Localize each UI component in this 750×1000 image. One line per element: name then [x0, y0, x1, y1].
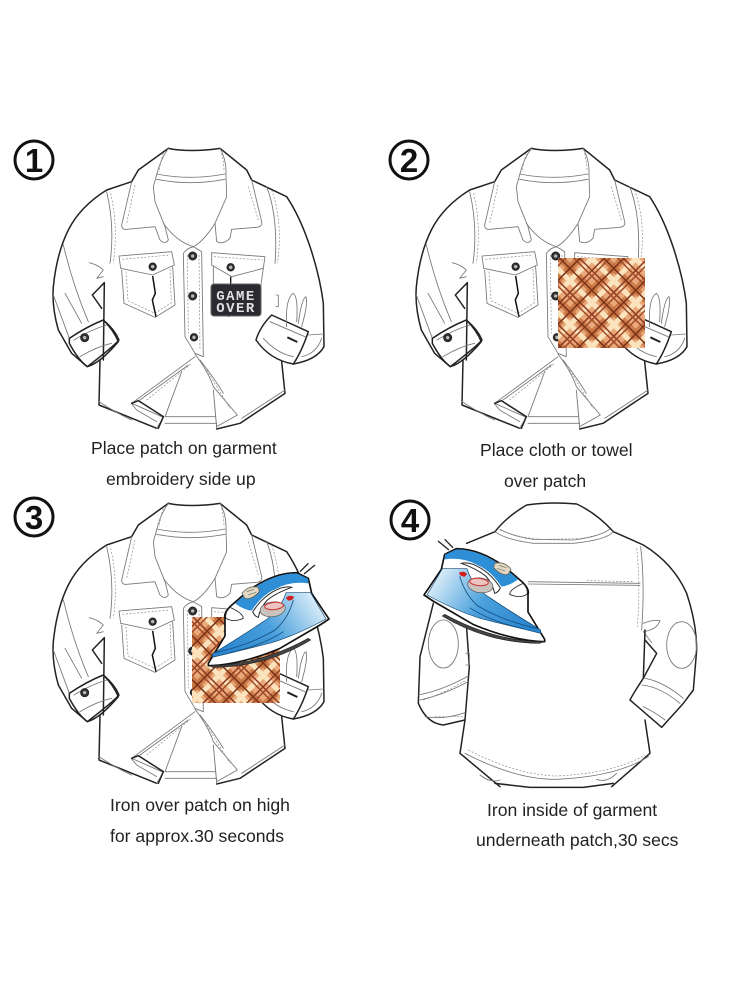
step number 4: 4 [401, 502, 420, 539]
step 4 panel [391, 501, 697, 850]
step number 4 [391, 501, 429, 539]
caption 4 [476, 800, 679, 850]
step 2 panel [390, 141, 687, 491]
caption 1: embroidery side up [106, 469, 256, 489]
step number 3: 3 [25, 499, 43, 536]
step number 2 [390, 141, 428, 179]
plaid cloth [192, 617, 280, 703]
plaid cloth [558, 258, 645, 348]
step number 1: 1 [25, 142, 43, 179]
caption 1 [91, 438, 277, 489]
caption 2 [480, 440, 633, 491]
icon: iron mirrored [424, 539, 545, 643]
caption 1: Place patch on garment [91, 438, 277, 458]
caption 2: over patch [504, 471, 586, 491]
step 3 panel [15, 498, 329, 846]
step 1 panel [15, 141, 324, 489]
step number 1 [15, 141, 53, 179]
shirt back with iron [418, 503, 697, 789]
shirt front with cloth and iron [53, 503, 329, 784]
caption 3: for approx.30 seconds [110, 826, 284, 846]
caption 4: underneath patch,30 secs [476, 830, 679, 850]
caption 3: Iron over patch on high [110, 795, 290, 815]
icon: iron [208, 563, 329, 667]
shirt front with cloth [416, 148, 687, 429]
patch: GAME OVER: GAME [216, 289, 256, 305]
patch: GAME OVER [211, 284, 261, 317]
patch: GAME OVER: OVER [216, 301, 256, 317]
caption 2: Place cloth or towel [480, 440, 633, 460]
caption 3 [110, 795, 290, 846]
step number 3 [15, 498, 53, 536]
step number 2: 2 [400, 142, 418, 179]
shirt front with patch [53, 148, 324, 429]
caption 4: Iron inside of garment [487, 800, 657, 820]
